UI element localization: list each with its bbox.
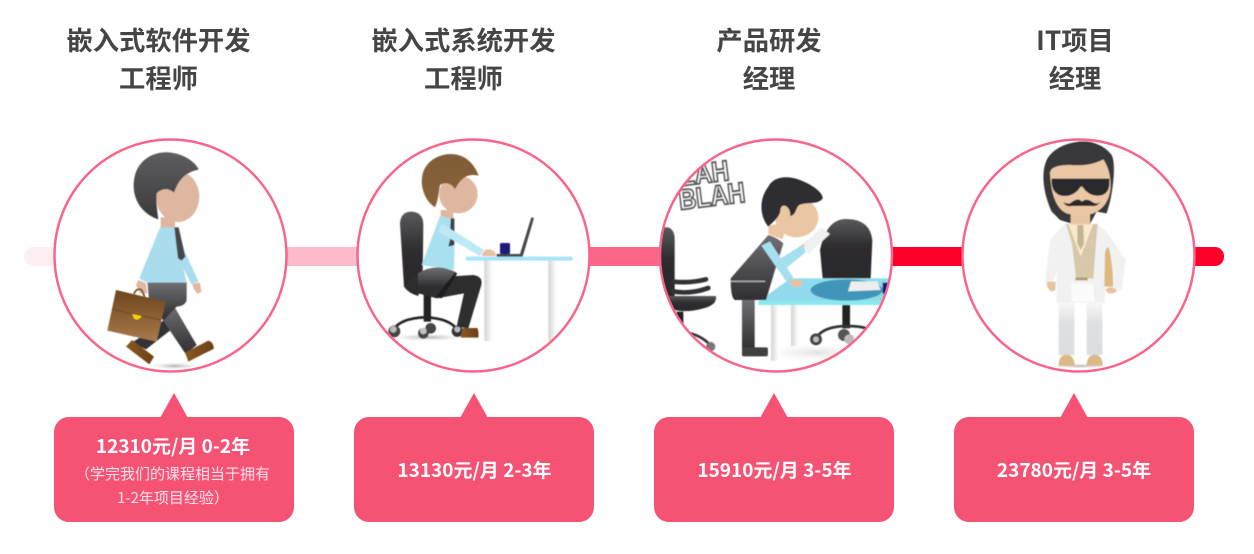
speech text: BLAH BLAH: BLAH: [661, 154, 731, 194]
title: IT项目经理: IT项目: [1036, 19, 1114, 58]
title: 嵌入式软件开发工程师: 嵌入式软件开发: [66, 19, 251, 58]
callout: 13130元/月 2-3年: [354, 393, 594, 522]
callout: 23780元/月 3-5年: 23780元/月 3-5年: [997, 456, 1151, 483]
callout: 15910元/月 3-5年: [654, 393, 894, 522]
panel: IT manager circle: [962, 140, 1194, 372]
panel: employee at laptop circle: [358, 140, 590, 372]
title: 产品研发经理: 经理: [743, 57, 795, 96]
title: 产品研发经理: 产品研发: [716, 19, 822, 58]
callout: 13130元/月 2-3年: 13130元/月 2-3年: [397, 456, 552, 483]
panel: product developer circle: [660, 140, 893, 372]
callout: 12310元/月 0-2年: 12310元/月 0-2年: [96, 432, 250, 459]
speech text: BLAH BLAH: [678, 159, 746, 212]
title: 嵌入式系统开发工程师: [371, 19, 556, 96]
callout: 12310元/月 0-2年: （学完我们的课程相当于拥有: [75, 463, 270, 484]
callout: 12310元/月 0-2年: 1-2年项目经验）: [117, 487, 229, 508]
title: 嵌入式软件开发工程师: 工程师: [119, 57, 198, 96]
title: IT项目经理: 经理: [1049, 57, 1101, 96]
title: 嵌入式系统开发工程师: 嵌入式系统开发: [371, 19, 556, 58]
callout: 12310元/月 0-2年: [54, 393, 294, 522]
title: 产品研发经理: [716, 19, 822, 96]
title: 嵌入式系统开发工程师: 工程师: [424, 57, 503, 96]
panel: walking employee circle: [54, 140, 286, 372]
title: 嵌入式软件开发工程师: [66, 19, 251, 96]
callout: 15910元/月 3-5年: 15910元/月 3-5年: [697, 456, 852, 483]
callout: 23780元/月 3-5年: [954, 393, 1194, 522]
title: IT项目经理: [1036, 19, 1114, 96]
speech text: BLAH BLAH: BLAH: [677, 176, 747, 216]
timeline bar: [24, 247, 1224, 266]
